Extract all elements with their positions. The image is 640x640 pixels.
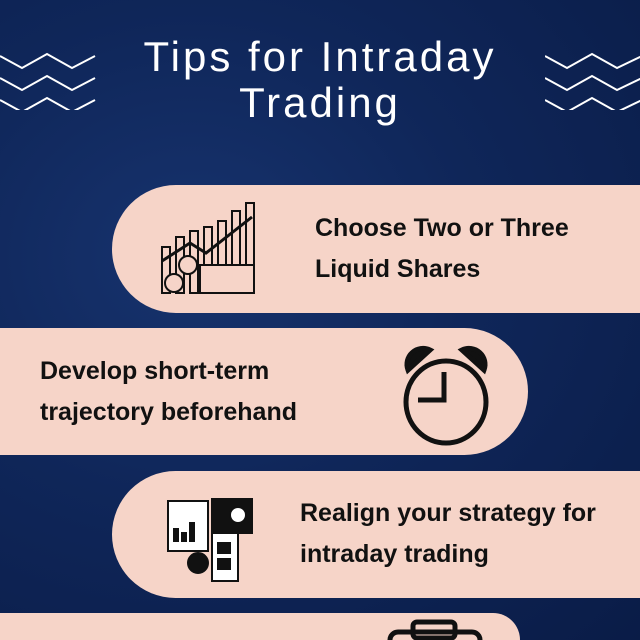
icon: people with charts	[167, 498, 253, 582]
text: Choose Two or Three	[315, 214, 569, 242]
title	[144, 33, 496, 126]
text: Develop short-term	[40, 357, 269, 385]
icon: alarm clock	[404, 346, 488, 446]
panel: realign strategy	[112, 471, 640, 598]
text: Liquid Shares	[315, 255, 480, 283]
icon: growth chart with coins	[161, 202, 255, 294]
text	[40, 357, 297, 426]
icon: briefcase	[388, 620, 482, 640]
text	[300, 499, 596, 568]
title: Trading	[239, 79, 401, 126]
text: Realign your strategy for	[300, 499, 596, 527]
panel: fourth tip	[0, 613, 520, 640]
panel: choose shares	[112, 185, 640, 313]
panel: develop trajectory	[0, 328, 528, 455]
text: trajectory beforehand	[40, 398, 297, 426]
text	[315, 214, 569, 283]
decoration: right zigzags	[545, 52, 640, 110]
text: intraday trading	[300, 540, 489, 568]
title: Tips for Intraday	[144, 33, 496, 80]
decoration: left zigzags	[0, 52, 96, 110]
